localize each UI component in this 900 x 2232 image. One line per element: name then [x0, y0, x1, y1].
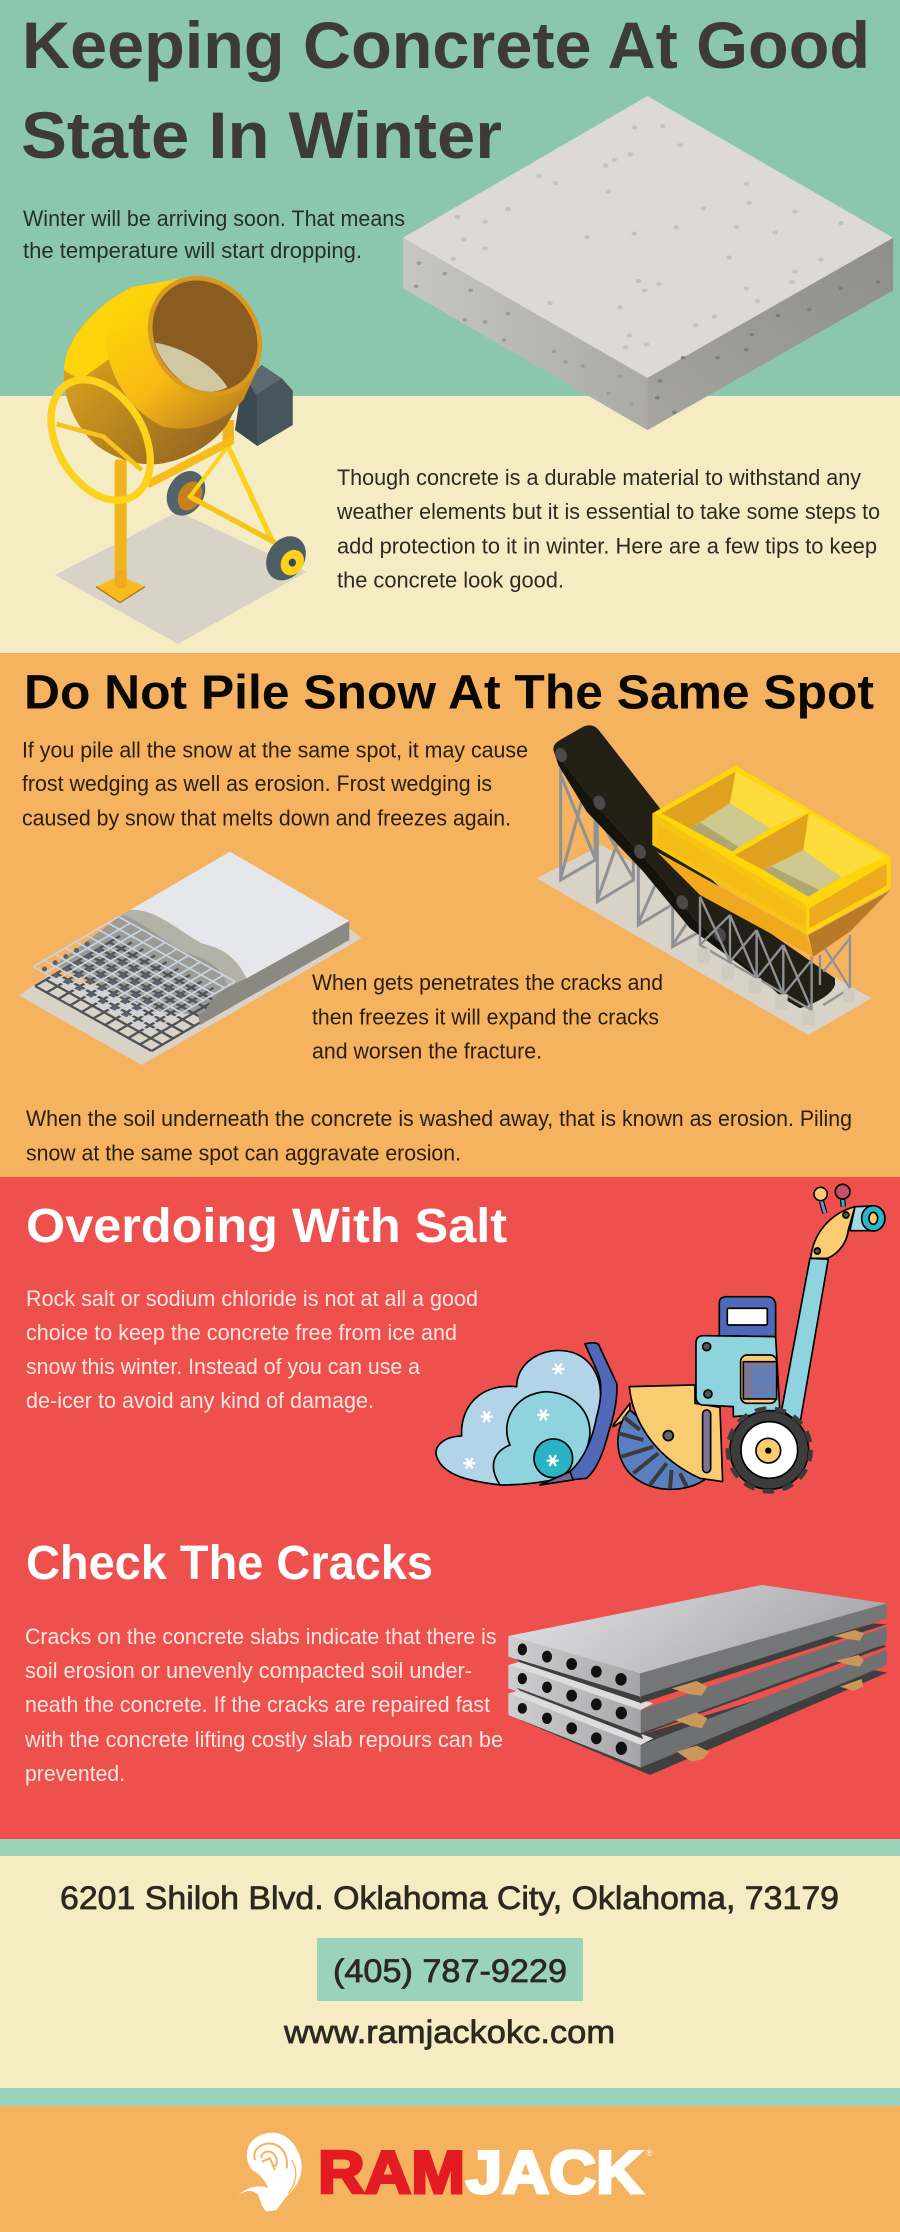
icon: conveyor and hopper	[537, 725, 891, 1035]
address: 6201 Shiloh Blvd. Oklahoma City, Oklahoma, 73179	[60, 1880, 839, 1916]
text block: frost wedging	[22, 738, 528, 830]
text block: protection tips: weather elements but it is essential to take some steps to	[336, 499, 880, 524]
text block: cracks expand: then freezes it will expand the cracks	[312, 1004, 659, 1030]
phone: (405) 787-9229	[333, 1953, 567, 1989]
text block: protection tips	[336, 465, 880, 592]
text block: erosion: snow at the same spot can aggravate erosion.	[26, 1140, 461, 1166]
logo wordmark	[318, 2139, 653, 2206]
logo wordmark: ®	[646, 2148, 653, 2158]
text block: frost wedging: If you pile all the snow at the same spot, it may cause	[22, 738, 528, 762]
text block: cracks: prevented.	[25, 1761, 125, 1786]
text block: frost wedging: frost wedging as well as erosion. Frost wedging is	[22, 771, 492, 796]
icon: snow blower	[436, 1184, 885, 1491]
panel: salt and cracks	[0, 1177, 900, 1839]
icon: mesh and concrete slab	[19, 852, 362, 1065]
phone	[317, 1938, 583, 2001]
text block: erosion: When the soil underneath the concrete is washed away, that is known as erosion. Piling	[26, 1106, 852, 1131]
text block: cracks: with the concrete lifting costly slab repours can be	[24, 1727, 503, 1752]
icon: ram head	[238, 2133, 302, 2212]
text block: cracks: soil erosion or unevenly compacted soil under-	[25, 1658, 472, 1683]
heading: check the cracks: Check The Cracks	[26, 1537, 433, 1590]
icon: stacked concrete slabs	[508, 1585, 887, 1775]
icon: concrete slab	[403, 96, 893, 430]
text block: protection tips: Though concrete is a durable material to withstand any	[337, 465, 861, 490]
text block: cracks expand: and worsen the fracture.	[312, 1038, 542, 1064]
panel: do not pile snow	[0, 653, 900, 1177]
text block: frost wedging: caused by snow that melts down and freezes again.	[22, 806, 511, 830]
text block: winter intro: the temperature will start dropping.	[23, 238, 362, 263]
heading: do not pile snow: Do Not Pile Snow At The Same Spot	[24, 666, 874, 720]
text block: erosion	[26, 1106, 852, 1166]
title	[21, 8, 870, 172]
text block: salt: de-icer to avoid any kind of damage.	[26, 1388, 374, 1413]
icon: cement mixer	[31, 257, 314, 644]
text block: protection tips: add protection to it in winter. Here are a few tips to keep	[337, 534, 877, 558]
text block: cracks expand: When gets penetrates the cracks and	[312, 970, 663, 995]
text block: salt	[26, 1286, 478, 1413]
panel: logo footer	[0, 2106, 900, 2232]
heading: overdoing with salt: Overdoing With Salt	[26, 1200, 507, 1253]
text block: cracks: Cracks on the concrete slabs indicate that there is	[25, 1624, 496, 1649]
website: www.ramjackokc.com	[283, 2014, 615, 2050]
logo wordmark: JACK	[466, 2139, 643, 2206]
title: State In Winter	[21, 98, 502, 172]
text block: salt: Rock salt or sodium chloride is not at all a good	[26, 1286, 478, 1311]
text block: cracks: neath the concrete. If the cracks are repaired fast	[25, 1692, 490, 1717]
panel: intro	[0, 0, 900, 653]
text block: winter intro	[23, 206, 405, 263]
panel: contact	[0, 1839, 900, 2106]
text block: cracks	[24, 1624, 503, 1786]
title: Keeping Concrete At Good	[22, 8, 870, 82]
text block: salt: snow this winter. Instead of you can use a	[26, 1354, 421, 1379]
text block: cracks expand	[312, 970, 663, 1064]
logo wordmark: RAM	[318, 2139, 465, 2206]
text block: winter intro: Winter will be arriving soon. That means	[23, 206, 405, 231]
text block: salt: choice to keep the concrete free from ice and	[26, 1320, 457, 1345]
text block: protection tips: the concrete look good.	[337, 568, 564, 592]
